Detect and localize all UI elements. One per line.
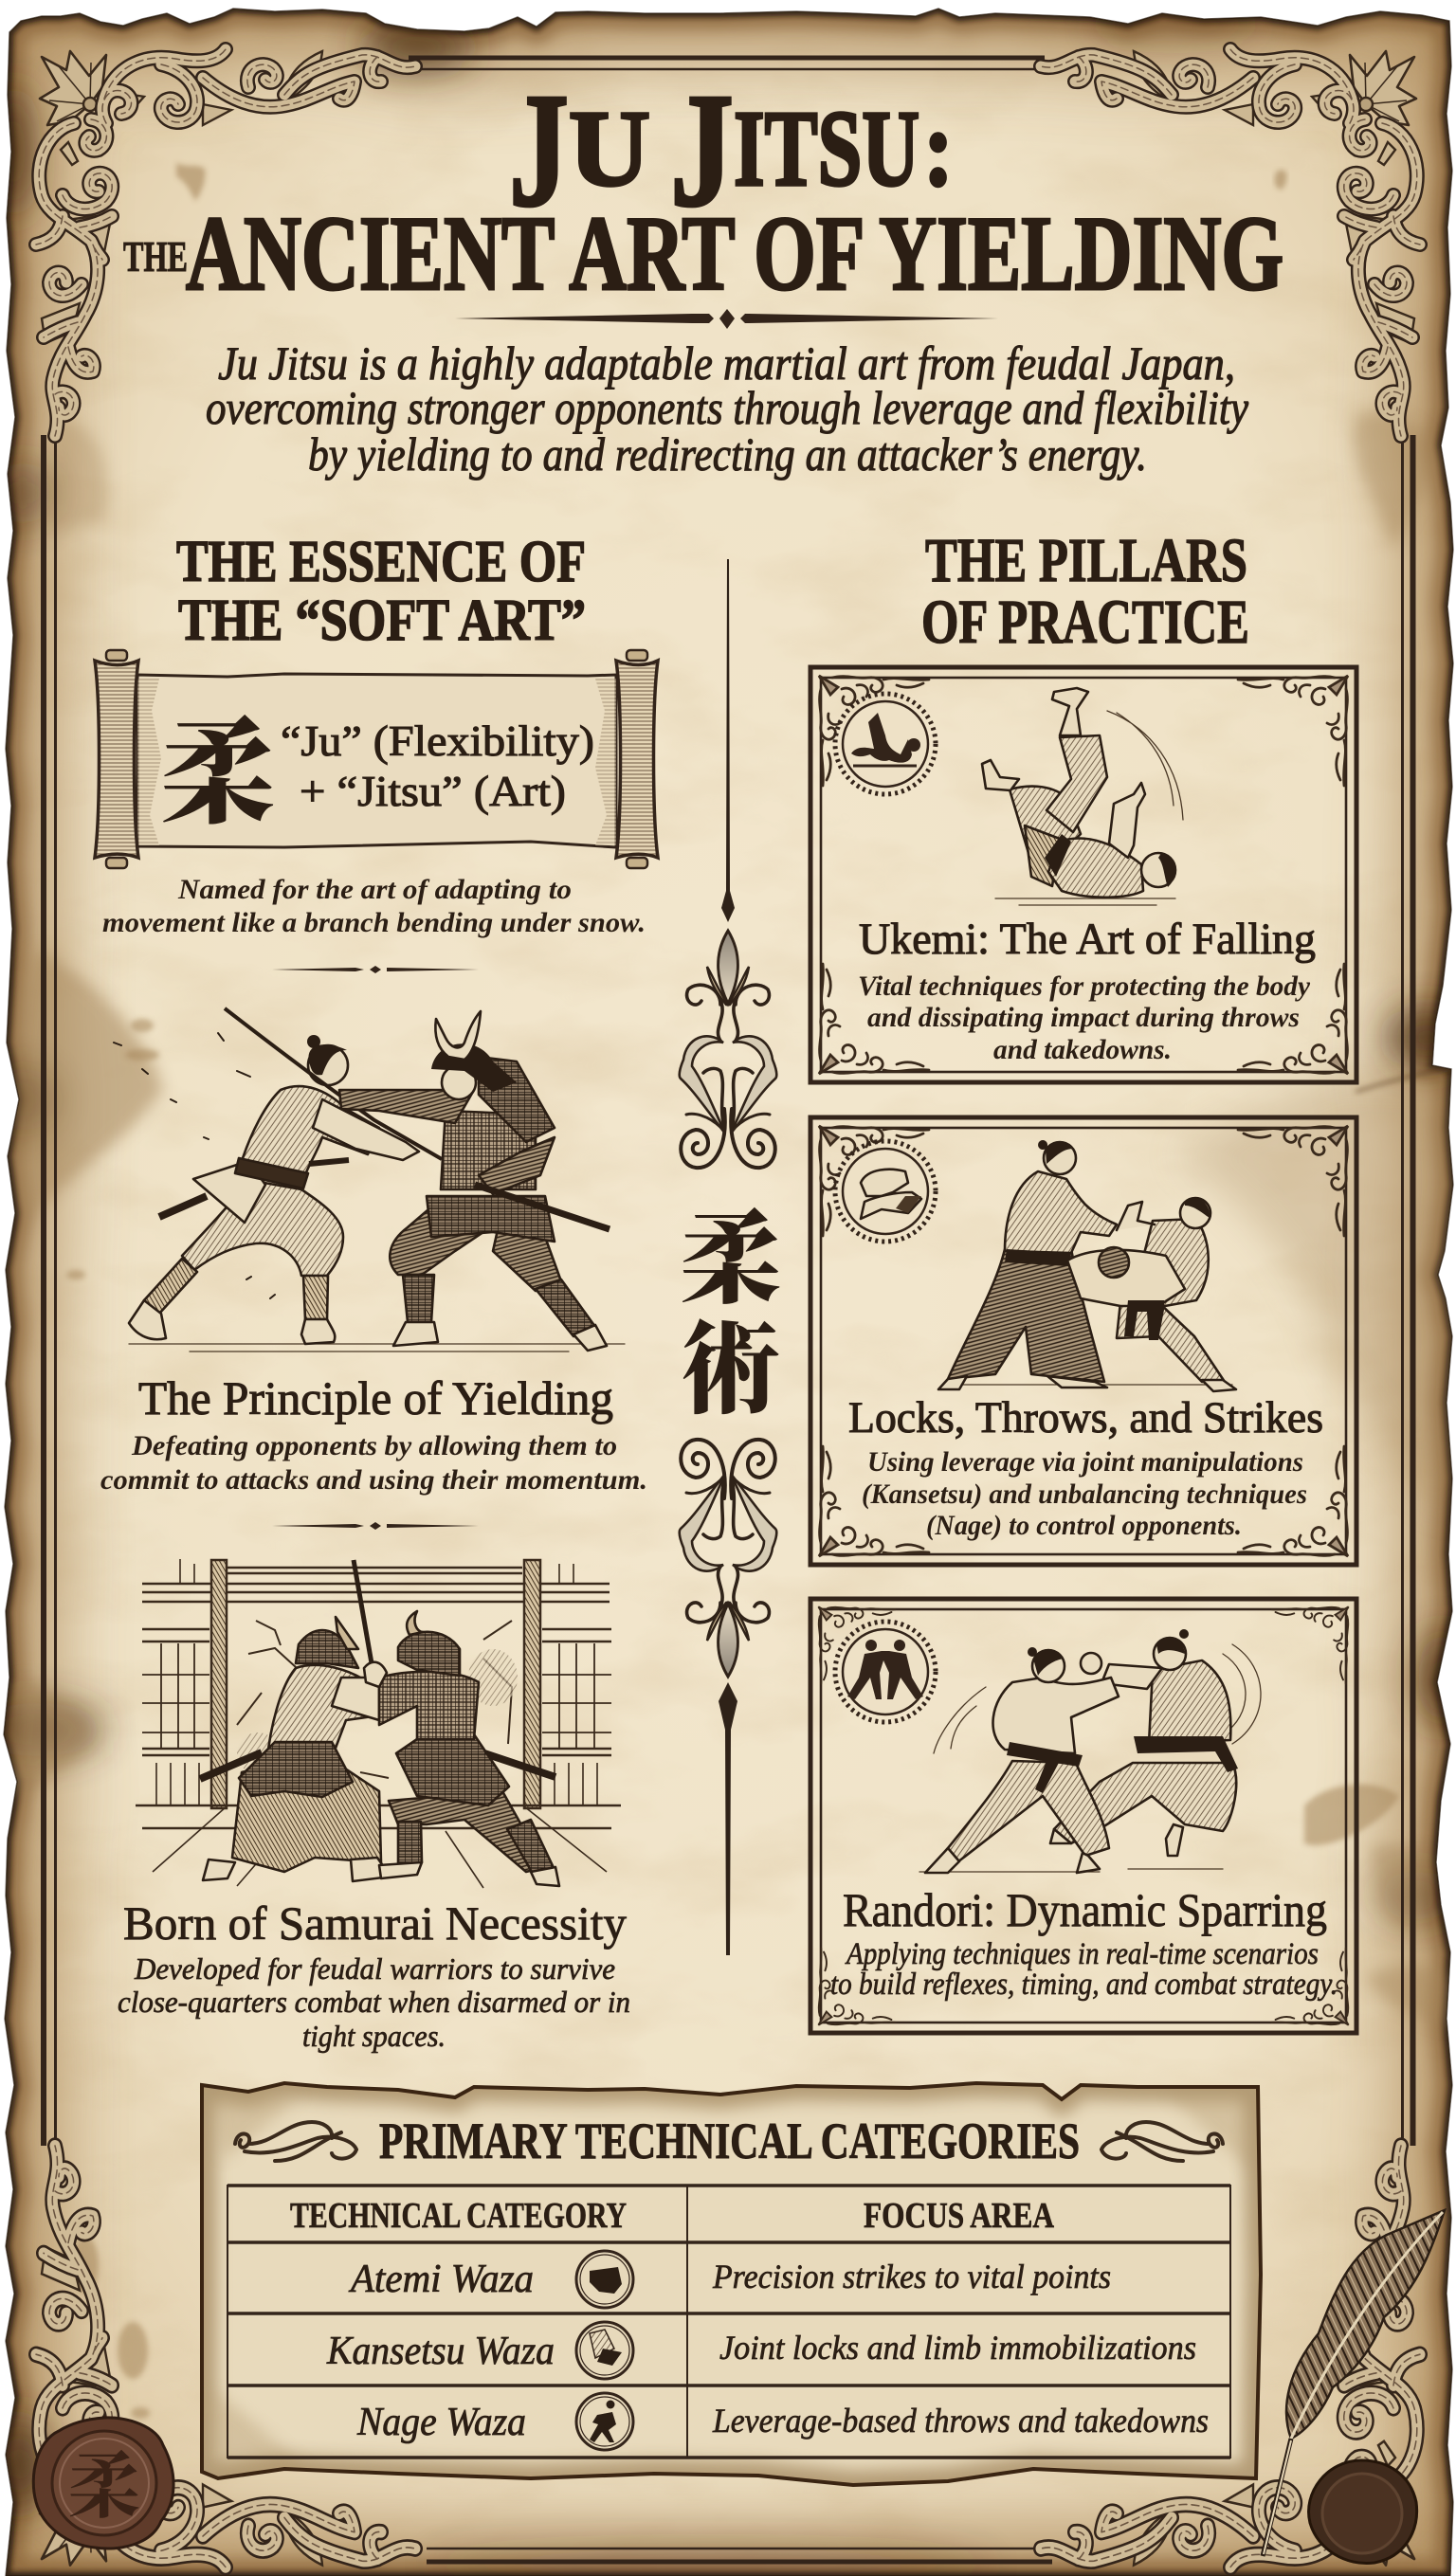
intro text: Ju Jitsu is a highly adaptable martial art from feudal Japan, [218, 336, 1235, 390]
crease [1356, 1067, 1450, 1092]
table header: FOCUS AREA [864, 2196, 1054, 2236]
intro text [206, 336, 1249, 481]
vertical kanji: 術 [681, 1290, 781, 1434]
table panel: primary technical categories [202, 2083, 1261, 2485]
illustration: samurai in dojo [136, 1559, 621, 1888]
card description: and takedowns. [993, 1034, 1172, 1065]
table category names: Atemi Waza [348, 2258, 534, 2301]
wax seal left [33, 2418, 173, 2549]
right roller [616, 650, 658, 868]
vertical kanji: 柔 [681, 1180, 781, 1324]
card description: Using leverage via joint manipulations [867, 1446, 1303, 1478]
card: locks throws strikes [810, 1117, 1356, 1565]
illustration: randori [919, 1629, 1261, 1873]
divider [272, 966, 479, 973]
scabbards [200, 1749, 555, 1779]
armored samurai [339, 1011, 607, 1351]
right column heading: OF PRACTICE [921, 588, 1249, 657]
icon: fist [576, 2251, 633, 2308]
table header [290, 2196, 1054, 2236]
card description: Vital techniques for protecting the body [858, 971, 1311, 1002]
wax seal right [1309, 2460, 1417, 2564]
yielding fighter [129, 1035, 419, 1344]
wax seal left: 柔 [68, 2429, 140, 2532]
left column heading: THE ESSENCE OF [176, 530, 586, 594]
card description: Applying techniques in real-time scenarios [845, 1937, 1319, 1971]
dojo room [136, 1559, 621, 1888]
left sparring figure [925, 1647, 1119, 1873]
necessity heading: Born of Samurai Necessity [123, 1896, 627, 1950]
necessity description [118, 1951, 630, 2053]
right column heading [921, 526, 1249, 657]
right samurai [379, 1611, 559, 1886]
flourish left [235, 2122, 356, 2161]
card description [830, 1937, 1338, 2002]
table header: TECHNICAL CATEGORY [290, 2196, 627, 2236]
title: ITSU [734, 88, 919, 209]
card description [862, 1446, 1307, 1541]
card corners [818, 1606, 1349, 2025]
scroll text [281, 717, 594, 815]
table focus areas [712, 2258, 1209, 2440]
table category names: Nage Waza [356, 2401, 526, 2444]
principle description [100, 1430, 647, 1496]
illustration: joint lock [938, 1140, 1236, 1391]
flourish right [1101, 2122, 1223, 2161]
scroll caption: movement like a branch bending under snow. [102, 907, 646, 938]
card description: (Kansetsu) and unbalancing techniques [862, 1478, 1307, 1510]
card heading: Locks, Throws, and Strikes [848, 1393, 1323, 1442]
icon: throwing figure [576, 2393, 633, 2450]
divider [272, 1522, 479, 1530]
title: : [923, 88, 954, 209]
necessity description: close-quarters combat when disarmed or in [118, 1985, 630, 2019]
card: ukemi [810, 667, 1356, 1082]
illustration: ukemi fall [982, 688, 1183, 905]
card description [858, 971, 1311, 1065]
scroll caption: Named for the art of adapting to [177, 874, 572, 905]
card heading: Randori: Dynamic Sparring [843, 1883, 1327, 1936]
card description: and dissipating impact during throws [867, 1002, 1300, 1033]
title: U [569, 88, 650, 209]
card corners [819, 676, 1348, 1074]
table category names [326, 2258, 555, 2444]
panel title: PRIMARY TECHNICAL CATEGORIES [379, 2113, 1080, 2169]
card heading: Ukemi: The Art of Falling [859, 915, 1316, 964]
necessity description: tight spaces. [302, 2019, 446, 2053]
card description: (Nage) to control opponents. [926, 1510, 1242, 1541]
title: THE [123, 232, 188, 281]
icon: open hand [576, 2322, 633, 2379]
title divider [455, 309, 998, 329]
card: randori [810, 1599, 1356, 2033]
right column heading: THE PILLARS [925, 526, 1247, 595]
title [123, 61, 1283, 313]
principle description: commit to attacks and using their momentum. [100, 1464, 647, 1496]
table category names: Kansetsu Waza [326, 2330, 555, 2373]
table grid [228, 2186, 1230, 2458]
card corners [819, 1126, 1348, 1556]
left roller [95, 650, 138, 868]
left column heading [176, 530, 586, 653]
title: J [509, 61, 569, 241]
left samurai [203, 1617, 391, 1881]
principle description: Defeating opponents by allowing them to [131, 1430, 617, 1461]
scroll text: “Ju” (Flexibility) [281, 717, 594, 765]
principle heading: The Principle of Yielding [138, 1371, 613, 1424]
scroll text: + “Jitsu” (Art) [300, 767, 566, 815]
intro text: by yielding to and redirecting an attacker’s energy. [308, 427, 1147, 481]
necessity description: Developed for feudal warriors to survive [134, 1951, 615, 1986]
scroll banner [95, 650, 658, 868]
icon: falling person [835, 694, 936, 794]
right sparring figure [1050, 1629, 1238, 1856]
illustration: principle of yielding duel [114, 1008, 625, 1351]
quill feather [1263, 2210, 1445, 2556]
table focus areas: Joint locks and limb immobilizations [719, 2329, 1196, 2367]
title: J [670, 61, 734, 241]
intro text: overcoming stronger opponents through leverage and flexibility [206, 381, 1249, 434]
scroll caption [102, 874, 646, 938]
table focus areas: Leverage-based throws and takedowns [712, 2402, 1209, 2440]
icon: sparring pair [835, 1622, 936, 1722]
central divider column [680, 559, 781, 1955]
left column heading: THE “SOFT ART” [178, 589, 586, 653]
card description: to build reflexes, timing, and combat strategy. [830, 1968, 1338, 2002]
katana [225, 1008, 442, 1159]
table focus areas: Precision strikes to vital points [712, 2258, 1111, 2295]
icon: grappling hands [835, 1141, 936, 1242]
raised sword [354, 1560, 372, 1663]
kanji ju: 柔 [161, 683, 275, 846]
vertical kanji [681, 1180, 781, 1434]
